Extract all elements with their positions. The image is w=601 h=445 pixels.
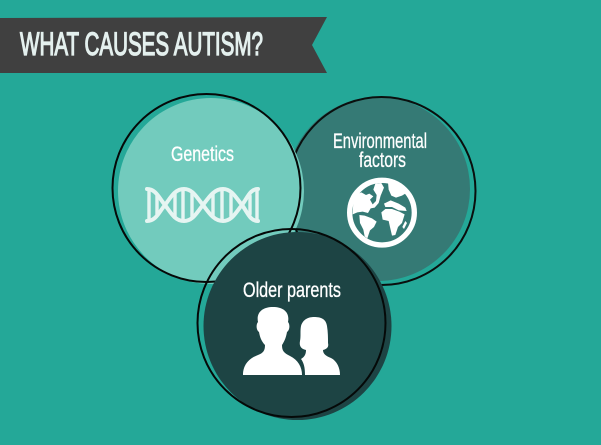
icon: globe <box>350 180 414 245</box>
label: environmental factors: factors <box>359 149 406 172</box>
icon: woman silhouette <box>300 317 340 375</box>
title text: WHAT CAUSES AUTISM? <box>20 26 263 62</box>
label: environmental factors <box>333 130 427 172</box>
panel: genetics <box>112 94 304 284</box>
icon: dna helix <box>147 189 258 221</box>
label: older parents: Older parents <box>243 279 341 302</box>
label: genetics: Genetics <box>171 143 234 166</box>
panel: environmental factors <box>286 97 476 285</box>
label: environmental factors: Environmental <box>333 130 427 153</box>
title banner <box>0 17 327 73</box>
icon: man silhouette <box>243 307 302 375</box>
panel: older parents <box>198 229 392 420</box>
